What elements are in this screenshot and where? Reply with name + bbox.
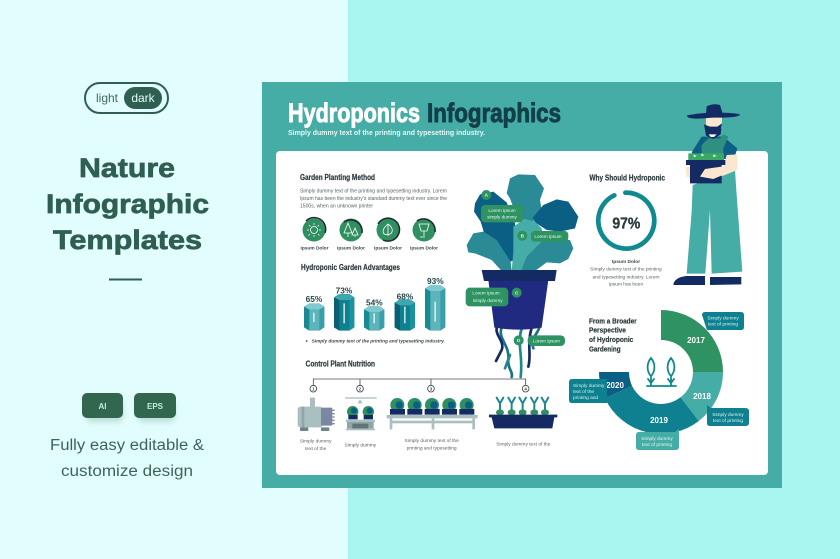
text: fully easy editable: Fully easy editable &: [50, 437, 205, 454]
badge: EPS: [134, 393, 176, 418]
text block: ipsum dolor: Simply dummy text of the printing: [590, 267, 662, 273]
heading: from a broader perspective: of Hydroponic: [589, 335, 634, 344]
toggle: light dark: light: [96, 91, 119, 105]
icon labels: Ipsum Dolor: [374, 246, 402, 252]
timeline connector: 2: [359, 386, 362, 391]
captions: printing and typesetting: [407, 446, 457, 452]
timeline connector: 3: [430, 386, 433, 391]
illustration: plant in pot: [466, 174, 578, 377]
timeline connector: 4: [524, 386, 527, 391]
callout: 2017: Simply dummy: [707, 316, 739, 322]
callout: C: Lorem Ipsum: [472, 291, 500, 296]
captions: Simply dummy text of the: [496, 441, 551, 447]
heading: from a broader perspective: [589, 316, 637, 354]
bar: 93%: 93%: [427, 276, 444, 286]
badge: AI: [82, 393, 123, 418]
callout: B: [517, 231, 568, 242]
text block: ipsum dolor: Ipsum Dolor: [612, 259, 640, 265]
callout: 2017: [702, 312, 744, 330]
callout: 2020: [569, 379, 607, 403]
section: garden planting method: Garden Planting Method: [300, 173, 375, 182]
callout: D: D: [517, 338, 521, 343]
text block: ipsum dolor: [590, 259, 662, 288]
heading: hydroponic garden advantages: Hydroponic Garden Advantages: [301, 263, 400, 272]
heading: from a broader perspective: Gardening: [589, 345, 621, 354]
callout: 2019: Simply dummy: [641, 436, 673, 442]
bar: 73%: [334, 285, 354, 331]
callout: 2019: text of printing: [642, 442, 672, 448]
icon labels: Ipsum Dolor: [337, 246, 365, 252]
bar inner labels: [313, 302, 436, 323]
section: broader perspective donut chart: [569, 310, 749, 450]
badge: EPS: EPS: [147, 402, 164, 411]
icon: cup: [412, 218, 436, 242]
text block: method description: Simply dummy text of the printing and typesetting industry. Lorem: [300, 188, 448, 194]
callout: 2018: [707, 405, 749, 426]
title: Infographics: [427, 98, 561, 128]
badge: AI: AI: [98, 402, 106, 411]
chart note: Simply dummy text of the printing and typesetting industry.: [312, 339, 445, 345]
icon: twin plants: [647, 358, 676, 386]
bar: 68%: [395, 291, 415, 331]
donut segment: 2020: 2020: [606, 381, 624, 390]
callout: C: simply dummy: [473, 298, 503, 303]
text block: method description: Ipsum has been the industry's standard dummy text ever since the: [300, 196, 447, 202]
callout: B: Lorem Ipsum: [534, 234, 562, 239]
bar: 54%: [364, 297, 384, 331]
roots: [496, 325, 540, 377]
text: fully easy editable: customize design: [61, 463, 193, 480]
illustration: gardener: [673, 104, 742, 285]
callout: 2020: text of the: [573, 389, 594, 395]
bar: 93%: [425, 276, 445, 331]
callout: 2020: printing and: [573, 395, 598, 401]
illustration: pump motor: [298, 398, 335, 431]
toggle: light dark: [85, 83, 168, 113]
section: garden planting method: [300, 173, 448, 252]
donut segment: 2019: [605, 386, 699, 434]
donut segment: 2017: 2017: [687, 336, 705, 345]
section: control plant nutrition: Control Plant Nutrition: [306, 360, 375, 369]
heading: nature infographic templates: Templates: [53, 225, 202, 255]
heading: nature infographic templates: Nature: [79, 153, 175, 183]
illustration: potted seedlings on stand: [345, 397, 377, 430]
title: Hydroponics: [288, 98, 420, 128]
text block: ipsum dolor: Ipsum has been: [609, 282, 643, 288]
text block: method description: 1500s, when an unknown printer: [300, 204, 373, 210]
captions: text of the: [305, 446, 327, 452]
donut segment: 2020: [599, 372, 632, 398]
chart: 97% progress ring: [598, 193, 654, 249]
callout: B: B: [521, 233, 525, 238]
captions: Simply dummy: [344, 443, 377, 449]
donut segment: 2019: 2019: [650, 416, 668, 425]
bar: 73%: 73%: [336, 285, 353, 295]
captions: Simply dummy text of the: [405, 438, 459, 444]
timeline connector: [310, 379, 529, 392]
pot: [488, 280, 548, 330]
bar: 68%: 68%: [397, 291, 414, 301]
donut segment: 2018: [680, 372, 723, 421]
text block: method description: [300, 188, 448, 210]
callout: C: C: [515, 290, 519, 295]
captions: Simply dummy: [300, 438, 332, 444]
icon labels: [301, 246, 438, 252]
captions: [300, 438, 551, 452]
bar: 65%: [304, 294, 324, 331]
callout: 2020: Simply dummy: [573, 383, 605, 389]
icon: trees: [340, 218, 362, 242]
callout: A: simply dummy: [487, 214, 518, 219]
panel: infographic sheet: [262, 82, 782, 488]
heading: from a broader perspective: From a Broader: [589, 316, 637, 325]
text: fully easy editable: [50, 437, 205, 480]
callout: C: [466, 288, 522, 306]
callout: D: Lorem Ipsum: [533, 338, 560, 343]
title: [288, 98, 561, 128]
donut segment: 2017: [661, 310, 723, 372]
callout: 2018: text of printing: [713, 418, 743, 424]
toggle: light dark: dark: [131, 91, 156, 105]
callout: A: [481, 190, 523, 222]
section: control plant nutrition: [298, 360, 557, 452]
illustration: shelf of five plants: [387, 398, 478, 429]
callout: A: A: [485, 193, 489, 198]
heading: from a broader perspective: Perspective: [589, 326, 626, 335]
illustration: tray of sprouts: [489, 398, 557, 428]
heading: nature infographic templates: [46, 153, 209, 255]
heading: nature infographic templates: Infographic: [46, 189, 209, 219]
callout: A: Lorem Ipsum: [488, 208, 516, 213]
panel: product description: [46, 83, 209, 480]
bar: 65%: 65%: [306, 294, 323, 304]
icon labels: Ipsum Dolor: [301, 246, 329, 252]
leaves: [474, 192, 516, 263]
bar chart: advantages: [304, 276, 445, 345]
timeline connector: 1: [312, 386, 315, 391]
callout: D: [514, 335, 565, 346]
callout: 2018: Simply dummy: [712, 412, 744, 418]
icon labels: Ipsum Dolor: [410, 246, 438, 252]
donut segment: 2018: 2018: [693, 392, 711, 401]
callout: 2019: [636, 429, 679, 450]
icon: leaf: [376, 218, 400, 242]
icon: sun: [302, 218, 326, 242]
chart: 97% progress ring: 97%: [612, 215, 641, 232]
section: why should hydroponic and gardener: [589, 104, 742, 288]
subtitle: Simply dummy text of the printing and typesetting industry.: [288, 130, 485, 137]
callout: 2017: text of printing: [708, 322, 738, 328]
bar: 54%: 54%: [366, 297, 383, 307]
text block: ipsum dolor: and typesetting industry. Lorem: [592, 274, 660, 280]
section: why should hydroponic and gardener: Why Should Hydroponic: [589, 174, 665, 183]
